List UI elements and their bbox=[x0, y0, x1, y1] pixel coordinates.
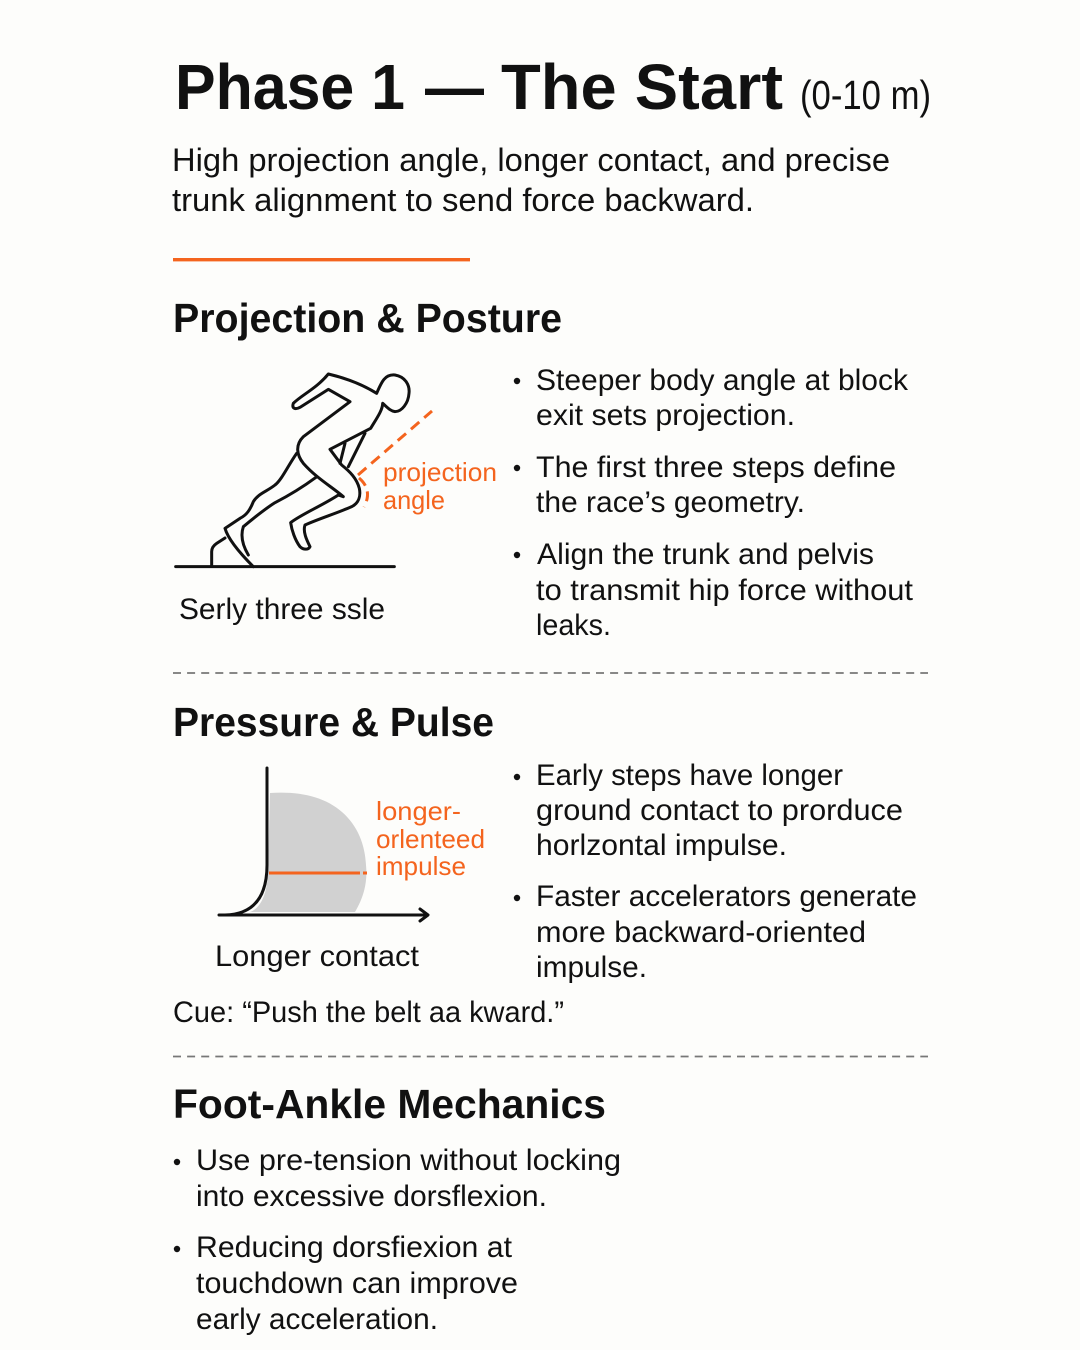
chart caption: Longer contact bbox=[215, 940, 420, 973]
impulse area bbox=[250, 793, 366, 912]
bullets: foot-ankle mechanics: Reducing dorsfiexion at bbox=[196, 1231, 513, 1264]
bullets: pressure and pulse: more backward-oriented bbox=[536, 916, 866, 949]
rear leg bbox=[225, 453, 316, 567]
bullets: pressure and pulse: ground contact to prorduce bbox=[536, 794, 903, 827]
bullets: projection and posture: to transmit hip force without bbox=[536, 574, 914, 607]
title: The Start bbox=[501, 51, 783, 123]
axes bbox=[219, 768, 428, 921]
impulse label bbox=[376, 796, 485, 881]
runner illustration bbox=[176, 374, 409, 567]
bullets: projection and posture: exit sets projection. bbox=[536, 399, 795, 432]
bullets: pressure and pulse: horlzontal impulse. bbox=[536, 829, 787, 862]
bullets: projection and posture bbox=[514, 364, 914, 642]
heading: projection and posture: Projection & Posture bbox=[173, 295, 562, 341]
heading: foot-ankle mechanics: Foot-Ankle Mechanics bbox=[173, 1081, 606, 1127]
heading: pressure and pulse: Pressure & Pulse bbox=[173, 699, 494, 745]
bullets: foot-ankle mechanics: Use pre-tension without locking bbox=[196, 1144, 621, 1177]
bullets: pressure and pulse: impulse. bbox=[536, 951, 647, 984]
bullets: foot-ankle mechanics bbox=[174, 1144, 621, 1336]
title bbox=[175, 51, 931, 123]
runner caption: Serly three ssle bbox=[179, 593, 385, 626]
impulse label: longer- bbox=[376, 796, 461, 826]
impulse line bbox=[269, 872, 367, 874]
impulse label: impulse bbox=[376, 851, 466, 881]
bullets: projection and posture: Steeper body angle at block bbox=[536, 364, 909, 397]
title: — bbox=[425, 51, 484, 123]
runner outline bbox=[291, 374, 409, 549]
starting block bbox=[212, 538, 225, 566]
projection angle label bbox=[383, 457, 497, 515]
bullets: projection and posture: The first three steps define bbox=[536, 451, 896, 484]
projection angle label: angle bbox=[383, 485, 445, 515]
bullets: projection and posture: leaks. bbox=[536, 609, 611, 642]
rear arm bbox=[340, 433, 365, 467]
orange accent rule bbox=[173, 258, 470, 261]
bullets: pressure and pulse bbox=[514, 759, 917, 984]
projection angle label: projection bbox=[383, 457, 497, 487]
ground line bbox=[176, 562, 394, 571]
bullets: pressure and pulse: Early steps have longer bbox=[536, 759, 843, 792]
bullets: foot-ankle mechanics: into excessive dorsflexion. bbox=[196, 1180, 547, 1213]
bullets: projection and posture: Align the trunk and pelvis bbox=[537, 538, 874, 571]
title: (0-10 m) bbox=[800, 72, 931, 118]
subtitle: trunk alignment to send force backward. bbox=[172, 182, 754, 218]
impulse chart bbox=[219, 768, 428, 921]
impulse label: orlenteed bbox=[376, 824, 485, 854]
bullets: foot-ankle mechanics: touchdown can improve bbox=[196, 1267, 518, 1300]
subtitle: High projection angle, longer contact, and precise bbox=[172, 142, 890, 178]
projection angle marker bbox=[358, 411, 432, 507]
subtitle bbox=[172, 142, 890, 218]
title: Phase 1 bbox=[175, 51, 405, 123]
cue: Cue: “Push the belt aa kward.” bbox=[173, 996, 564, 1029]
bullets: foot-ankle mechanics: early acceleration. bbox=[196, 1303, 438, 1336]
bullets: pressure and pulse: Faster accelerators generate bbox=[536, 880, 917, 913]
bullets: projection and posture: the race’s geometry. bbox=[536, 486, 805, 519]
